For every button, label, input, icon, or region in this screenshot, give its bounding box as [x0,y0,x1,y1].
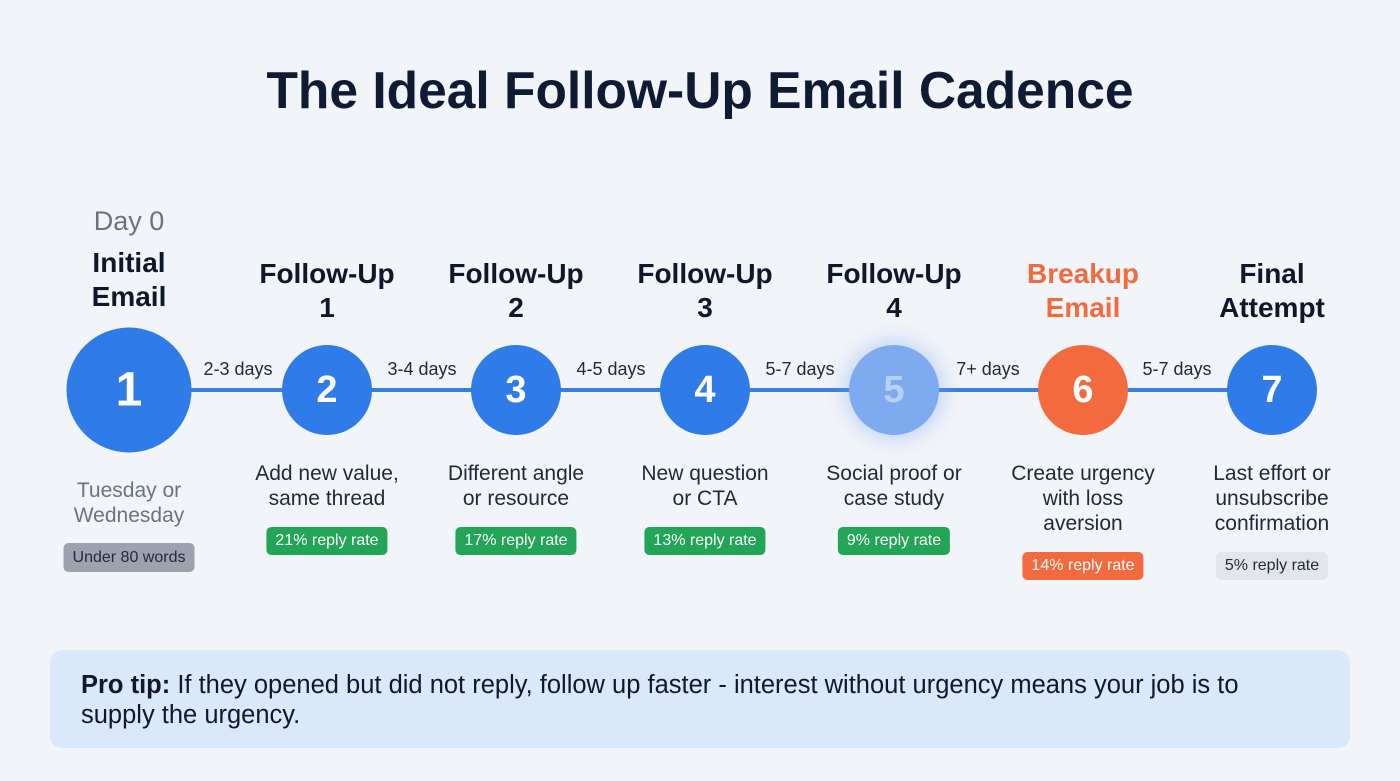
gap labels [203,359,1212,379]
circle 7 [1227,345,1317,435]
heading: initial email [92,247,166,312]
badge [838,527,950,555]
circle 1 [66,328,192,452]
step 2 [255,258,399,555]
description: Add new value, [255,462,399,485]
description: confirmation [1215,512,1329,535]
step 3 [448,258,584,555]
description [641,462,769,510]
description: unsubscribe [1215,487,1329,510]
heading: Breakup [1027,258,1139,289]
circle 3 [471,345,561,435]
circle 4: 4 [694,368,716,410]
text: timing: Tuesday or [77,479,181,502]
step 6 [1011,258,1155,580]
description [826,462,962,510]
gap labels: 5-7 days [1142,359,1212,379]
circle 2 [282,345,372,435]
heading: 1 [319,292,335,323]
description: or resource [463,487,569,510]
description: aversion [1043,512,1123,535]
heading: 3 [697,292,713,323]
timeline line [129,388,1272,392]
badge: 13% reply rate [653,532,757,549]
title: The Ideal Follow-Up Email Cadence [266,61,1134,119]
heading: Follow-Up [637,258,773,289]
circle 6: 6 [1072,368,1094,410]
step 4 [637,258,773,555]
pro tip callout [50,650,1350,748]
badge [1216,552,1328,580]
description: Create urgency [1011,462,1155,485]
description: case study [844,487,944,510]
heading: Follow-Up [448,258,584,289]
circle 5 [849,345,939,435]
description: New question [641,462,769,485]
heading: Follow-Up [259,258,395,289]
text: timing [74,479,184,527]
badge: 5% reply rate [1225,557,1319,574]
description: with loss [1043,487,1123,510]
description: Social proof or [826,462,962,485]
description: Last effort or [1213,462,1331,485]
heading: 4 [886,292,902,323]
step 5 [826,258,962,555]
badge [1022,552,1144,580]
heading [826,258,962,323]
description: same thread [269,487,385,510]
description [1011,462,1155,535]
circle 3: 3 [505,368,527,410]
gap labels: 4-5 days [576,359,646,379]
circle 2: 2 [316,368,338,410]
badge [266,527,388,555]
badge: under 80 words: Under 80 words [73,549,185,566]
heading [448,258,584,323]
description: or CTA [673,487,737,510]
description [1213,462,1331,535]
heading [637,258,773,323]
gap labels: 3-4 days [387,359,457,379]
badge: 14% reply rate [1031,557,1135,574]
label: day 0: Day 0 [94,206,164,236]
description: Different angle [448,462,584,485]
circle 6 [1038,345,1128,435]
step 1 [64,206,194,572]
circle 7: 7 [1261,368,1283,410]
badge: 21% reply rate [275,532,379,549]
description [255,462,399,510]
heading: Attempt [1219,292,1325,323]
badge: 9% reply rate [847,532,941,549]
circle 1: 1 [116,364,142,416]
text: timing: Wednesday [74,504,184,527]
heading: Email [1046,292,1120,323]
badge: under 80 words [64,543,194,572]
heading [259,258,395,323]
heading: initial email: Email [92,281,166,312]
circle 4 [660,345,750,435]
step 7 [1213,258,1331,580]
badge [455,527,577,555]
heading: initial email: Initial [92,247,166,278]
heading [1027,258,1139,323]
circle 5: 5 [883,368,905,410]
description [448,462,584,510]
heading: 2 [508,292,524,323]
badge [644,527,766,555]
pro tip callout: Pro tip: If they opened but did not reply, follow up faster - interest without urgency means your job is to [81,671,1239,699]
gap labels: 2-3 days [203,359,273,379]
gap labels: 7+ days [956,359,1020,379]
badge: 17% reply rate [464,532,568,549]
heading: Final [1239,258,1305,289]
pro tip callout: supply the urgency. [81,701,300,729]
heading [1219,258,1325,323]
gap labels: 5-7 days [765,359,835,379]
heading: Follow-Up [826,258,962,289]
